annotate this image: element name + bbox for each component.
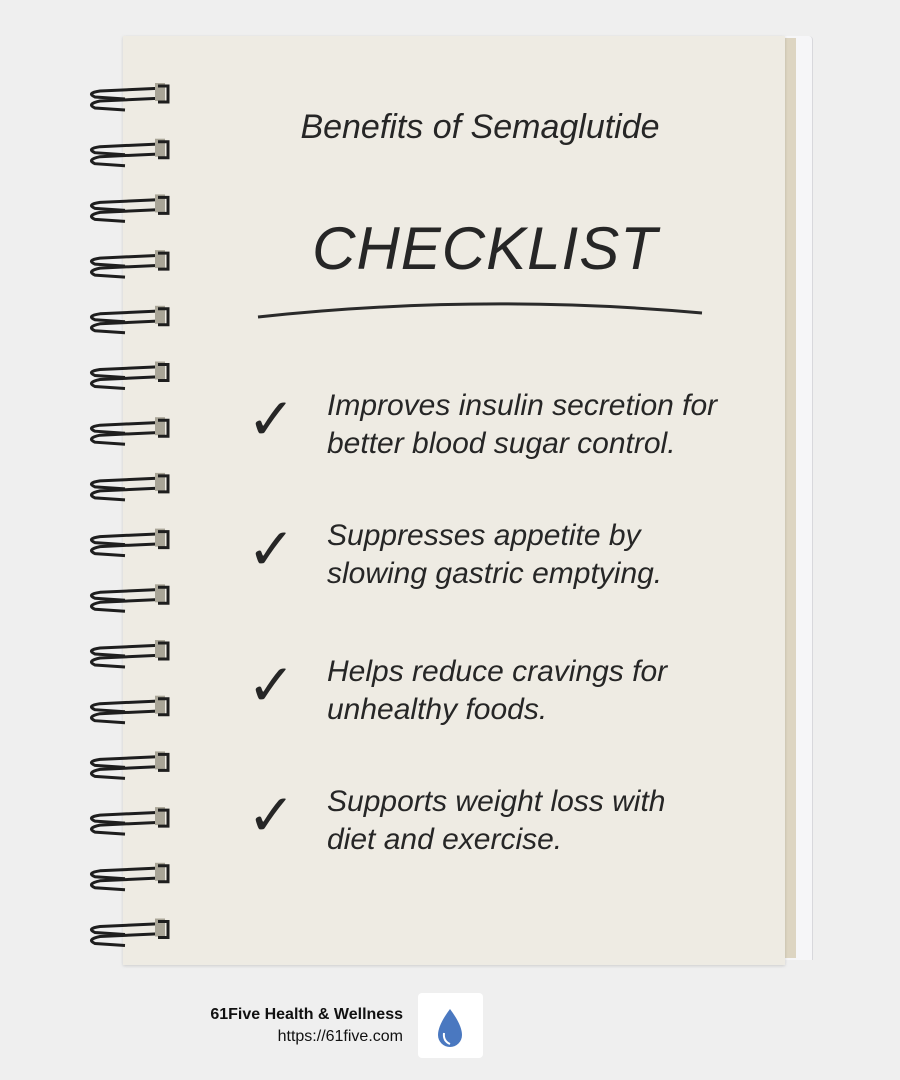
title: CHECKLIST [312, 215, 658, 282]
spiral rings [90, 83, 170, 947]
item 3: unhealthy foods. [327, 693, 547, 726]
item 1: better blood sugar control. [327, 427, 676, 460]
item 1: ✓ [247, 387, 296, 452]
item 4: diet and exercise. [327, 823, 562, 856]
item 3: Helps reduce cravings for [327, 655, 667, 688]
footer brand: https://61five.com [278, 1028, 403, 1045]
back pages [780, 36, 813, 960]
item 2 [247, 517, 662, 590]
item 1 [247, 387, 718, 460]
item 1: Improves insulin secretion for [327, 389, 717, 422]
item 2: slowing gastric emptying. [327, 557, 662, 590]
footer brand [210, 1006, 403, 1045]
rings repeated [91, 83, 168, 110]
subtitle: Benefits of Semaglutide [300, 108, 660, 146]
item 2: Suppresses appetite by [327, 519, 641, 552]
footer brand: 61Five Health & Wellness [210, 1006, 403, 1023]
page [123, 36, 785, 965]
item 4 [247, 783, 666, 856]
item 3: ✓ [247, 653, 296, 718]
item 4: ✓ [247, 783, 296, 848]
item 3 [247, 653, 668, 726]
item 2: ✓ [247, 517, 296, 582]
logo [418, 993, 483, 1058]
checklist [247, 387, 718, 856]
item 4: Supports weight loss with [327, 785, 666, 818]
underline [258, 302, 702, 318]
